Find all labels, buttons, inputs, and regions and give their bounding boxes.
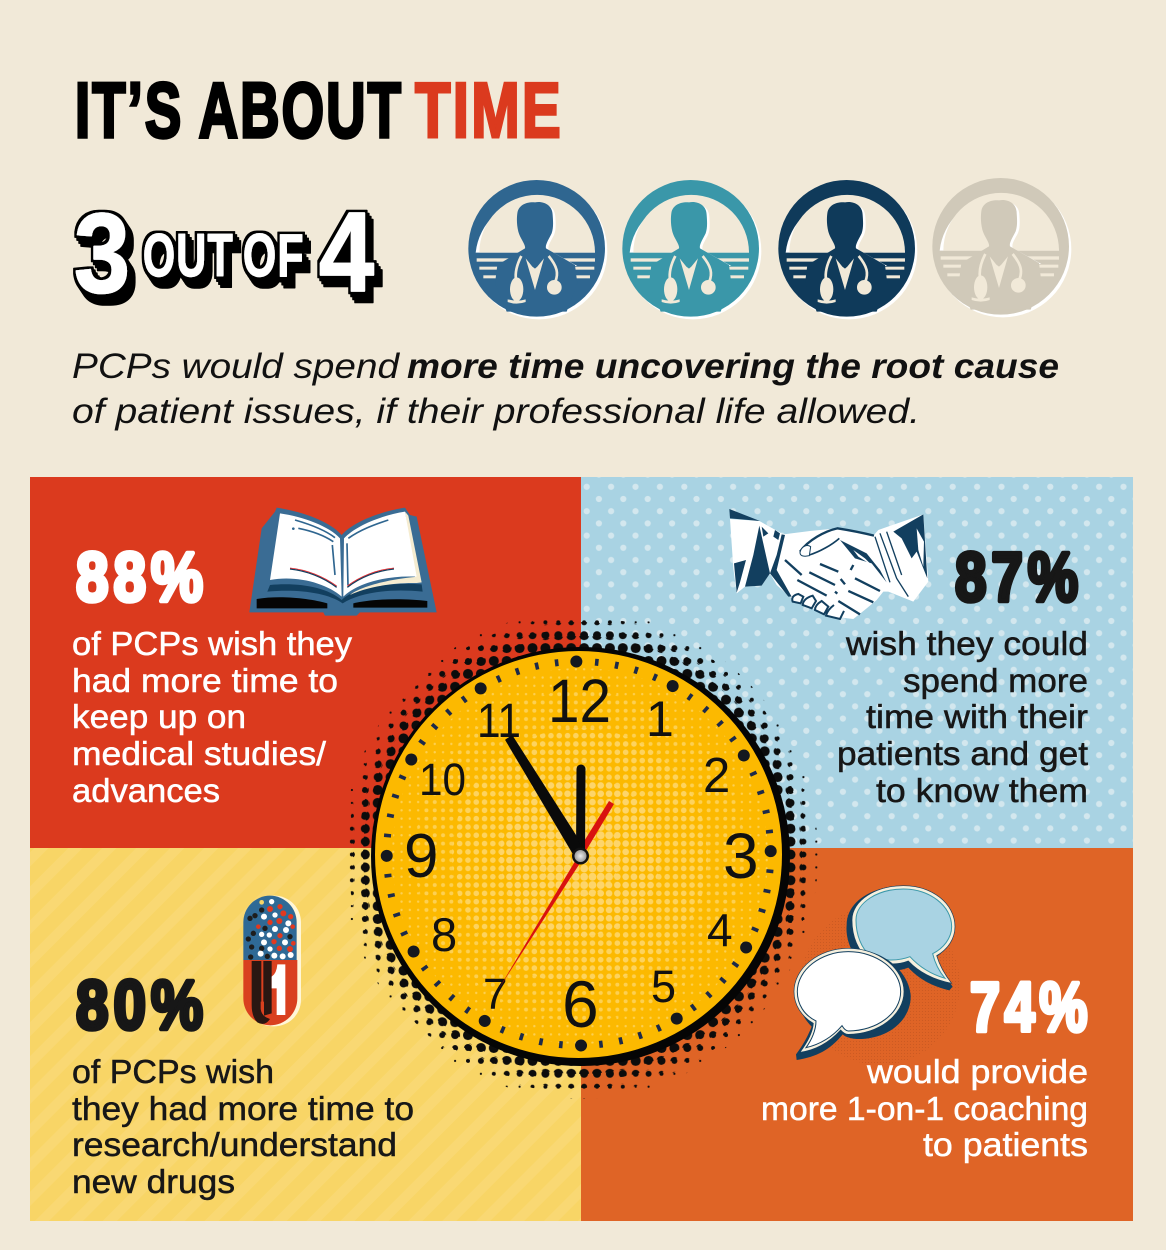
description 74%: to patients [923, 1126, 1088, 1163]
description 88%: advances [72, 772, 220, 809]
panel content: 87 percent [729, 509, 1088, 809]
stat 87%: 87% [955, 538, 1083, 616]
icon: handshake [729, 509, 928, 619]
clock hub [572, 848, 589, 864]
clock [371, 647, 790, 1066]
stat 88%: 88% [76, 538, 208, 616]
description 88%: of PCPs wish they [72, 625, 353, 662]
clock numerals: 6 [562, 967, 599, 1041]
icon: open book [249, 508, 437, 616]
panel: red background [30, 477, 581, 848]
icon: doctor navy [778, 180, 917, 319]
intro text: more time uncovering the root cause [407, 347, 1059, 386]
minute hand [506, 736, 586, 858]
description 74%: would provide [866, 1053, 1088, 1090]
3 out of 4 heading: OF [243, 222, 305, 289]
clock numerals: 7 [483, 970, 507, 1019]
panel: blue dotted background [581, 477, 1133, 848]
description 88%: keep up on [72, 698, 246, 735]
intro text: PCPs would spend [72, 347, 401, 386]
title: TIME [415, 66, 563, 154]
3 out of 4 heading: OUT [143, 222, 234, 289]
description 80%: new drugs [72, 1163, 235, 1200]
icon: capsule [243, 896, 301, 1026]
intro text [72, 347, 1059, 431]
clock numerals: 1 [646, 691, 674, 747]
description 74% [761, 1053, 1088, 1163]
clock numerals: 12 [548, 667, 611, 735]
clock numerals: 5 [651, 961, 676, 1012]
clock numerals [404, 667, 759, 1041]
doctor icons row [468, 178, 1071, 319]
stat 80%: 80% [76, 966, 208, 1044]
title: IT’S ABOUT [75, 66, 403, 154]
stat 74%: 74% [970, 968, 1092, 1046]
clock numerals: 4 [707, 904, 733, 956]
clock numerals: 10 [419, 754, 466, 805]
hour hand [576, 769, 586, 856]
minute ticks [384, 659, 773, 1048]
description 88%: medical studies/ [72, 735, 327, 772]
3 out of 4 heading: 4 [319, 189, 374, 315]
intro text: of patient issues, if their professional life allowed. [72, 392, 920, 431]
description 87%: wish they could [845, 625, 1088, 662]
description 80%: they had more time to [72, 1090, 414, 1127]
panel content: 74 percent [761, 886, 1092, 1163]
description 74%: more 1-on-1 coaching [761, 1090, 1088, 1127]
description 87%: spend more [903, 662, 1088, 699]
clock numerals: 3 [723, 820, 759, 892]
description 88% [72, 625, 353, 809]
description 87%: patients and get [837, 735, 1088, 772]
icon: speech bubbles [794, 886, 960, 1065]
description 80% [72, 1053, 414, 1200]
panel: orange background [581, 848, 1133, 1221]
description 87% [837, 625, 1088, 809]
halftone burst behind clock [342, 611, 818, 1099]
clock face [375, 651, 782, 1058]
icon: doctor grey [932, 178, 1071, 317]
description 80%: of PCPs wish [72, 1053, 274, 1090]
clock numerals: 11 [477, 695, 521, 748]
panel content: 88 percent [72, 508, 437, 809]
clock numerals: 2 [703, 749, 730, 803]
description 87%: time with their [866, 698, 1088, 735]
panel content: 80 percent [72, 896, 414, 1200]
description 88%: had more time to [72, 662, 338, 699]
panel: yellow striped background [30, 848, 581, 1221]
3 out of 4 heading [74, 189, 374, 316]
clock rim [371, 647, 790, 1066]
clock numerals: 8 [431, 908, 457, 961]
description 80%: research/understand [72, 1126, 397, 1163]
icon: doctor blue [468, 180, 607, 319]
clock numerals: 9 [404, 822, 438, 891]
3 out of 4 heading: 3 [74, 190, 130, 316]
description 87%: to know them [876, 772, 1088, 809]
hour markers [378, 653, 779, 1054]
icon: doctor teal [622, 180, 761, 319]
second hand [498, 801, 614, 990]
